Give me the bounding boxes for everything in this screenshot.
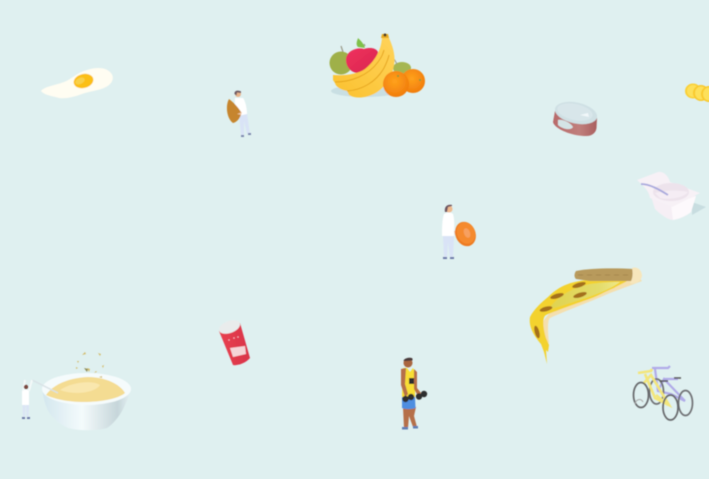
icon: fruit pile [330, 34, 425, 98]
orange disc [454, 230, 458, 235]
crust base [540, 274, 642, 343]
yellow bike [638, 369, 669, 405]
pear [393, 62, 411, 74]
porridge [46, 377, 125, 402]
green apple [341, 46, 343, 52]
figure [22, 390, 29, 405]
arms [401, 368, 408, 397]
spoon [32, 380, 58, 393]
head [446, 206, 452, 212]
icon: yogurt cup [637, 172, 706, 220]
icon: soda can [217, 318, 250, 365]
dumbbells [405, 397, 411, 399]
pepperoni [572, 281, 586, 289]
icon: fried egg [41, 68, 113, 98]
icon: tin can [553, 98, 599, 136]
icon: melting pizza slice [530, 268, 642, 364]
icon: athlete with dumbbells [401, 358, 427, 430]
purple bike [652, 366, 685, 401]
logo [409, 378, 414, 384]
icon: person carrying almond [227, 91, 251, 137]
bowl body [42, 388, 131, 430]
head [404, 358, 412, 368]
tank top [402, 368, 415, 397]
shorts [402, 397, 416, 409]
head [235, 91, 241, 97]
crust roll [574, 268, 634, 281]
icon: bicycles [634, 366, 692, 420]
icon: lemon slices [685, 84, 709, 102]
shoes [402, 426, 418, 430]
legs [443, 236, 454, 258]
almond [227, 99, 241, 123]
torso [442, 212, 454, 236]
legs [239, 113, 250, 136]
flakes [76, 352, 104, 378]
cheese [530, 277, 632, 364]
legs [403, 407, 417, 428]
icon: cereal bowl with small figure [22, 352, 131, 430]
oranges [401, 69, 425, 93]
torso [235, 98, 247, 116]
bananas [333, 36, 395, 98]
red apple [364, 44, 365, 46]
icon: person holding orange [442, 205, 479, 259]
